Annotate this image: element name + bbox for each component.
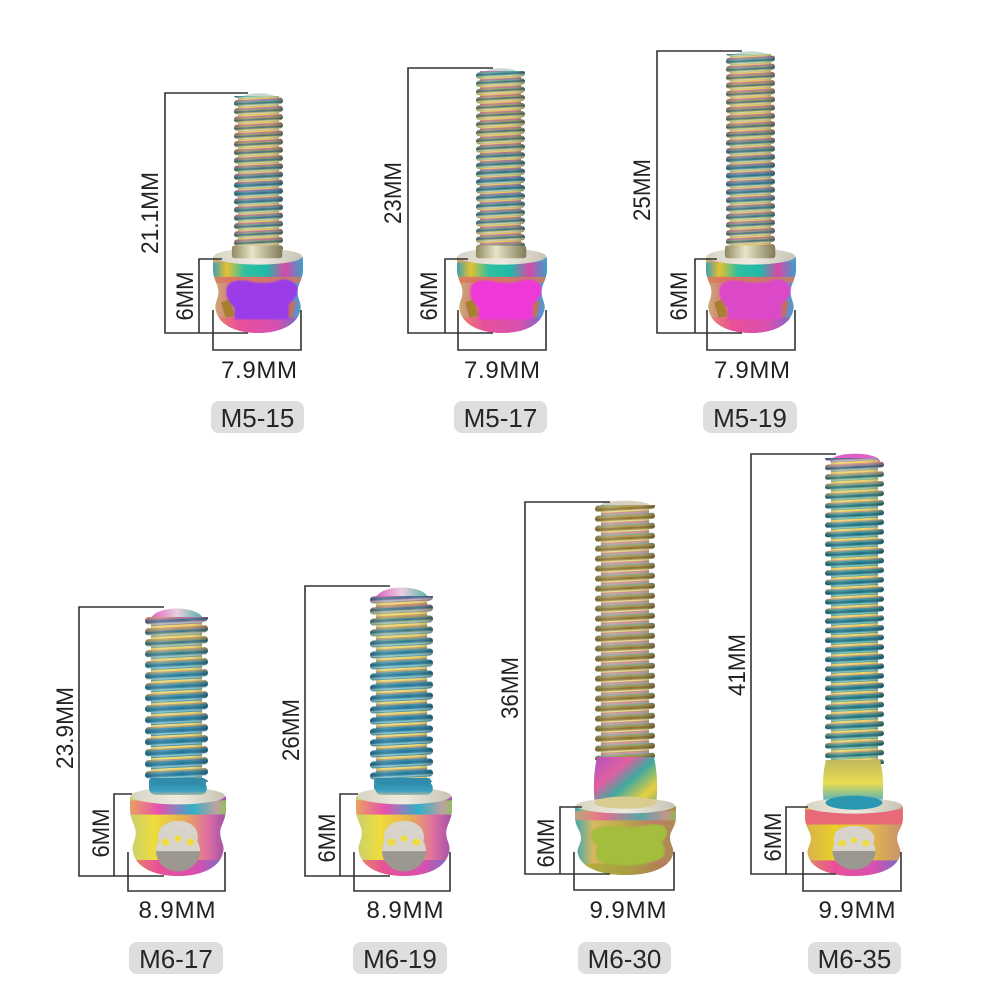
- dimension: 9.9MM: 9.9MM: [818, 897, 896, 924]
- bolt: M6-35: [805, 454, 903, 876]
- dimension lines: M6-19: [305, 586, 450, 891]
- threaded shaft: [145, 608, 208, 794]
- dimension: 36MM: 36MM: [497, 657, 524, 719]
- threaded shaft: [823, 454, 884, 812]
- bolt: M6-30: [575, 501, 676, 875]
- threaded shaft: [476, 68, 525, 254]
- dimension: 6MM: 6MM: [88, 808, 115, 858]
- dimension: 6MM: 6MM: [314, 814, 341, 862]
- socket head: [130, 782, 226, 876]
- dimension: 6MM: 6MM: [416, 272, 443, 320]
- dimension: 6MM: 6MM: [666, 272, 693, 320]
- label: M6-17: M6-17: [139, 944, 213, 974]
- label: M6-19: M6-19: [363, 944, 437, 974]
- dimension lines: M5-19: [657, 51, 795, 350]
- bolt: M5-17: [457, 68, 547, 333]
- bolt: M6-17: [130, 608, 226, 876]
- dimension: 6MM: 6MM: [172, 272, 199, 320]
- dimension lines: M5-15: [165, 93, 301, 350]
- dimension lines: M6-17: [79, 607, 225, 891]
- label: M5-19: M5-19: [713, 403, 787, 433]
- dimension: 23.9MM: 23.9MM: [52, 687, 79, 769]
- dimension: 25MM: 25MM: [629, 159, 656, 221]
- dimension: 7.9MM: 7.9MM: [714, 357, 790, 384]
- socket head: [356, 782, 452, 876]
- dimension: 41MM: 41MM: [724, 634, 751, 696]
- label: M6-30: M6-30: [588, 944, 661, 974]
- socket head: [575, 796, 676, 875]
- threaded shaft: [594, 501, 657, 812]
- socket head: [805, 796, 903, 876]
- socket head: [457, 245, 547, 333]
- socket head: [213, 245, 303, 333]
- bolt: M5-19: [706, 51, 796, 333]
- dimension: 6MM: 6MM: [760, 812, 787, 862]
- dimension: 21.1MM: 21.1MM: [137, 172, 164, 254]
- socket head: [706, 245, 796, 333]
- label: M6-35: M6-35: [818, 944, 891, 974]
- dimension: 23MM: 23MM: [380, 162, 407, 224]
- dimension: 6MM: 6MM: [533, 818, 560, 868]
- threaded shaft: [370, 588, 433, 794]
- icon: engraved logo: [156, 821, 200, 872]
- icon: engraved logo: [832, 826, 876, 870]
- threaded shaft: [234, 93, 283, 254]
- threaded shaft: [726, 51, 775, 254]
- dimension: 7.9MM: 7.9MM: [464, 357, 540, 384]
- dimension lines: M6-35: [751, 454, 901, 891]
- label: M5-15: M5-15: [221, 403, 294, 433]
- dimension: 8.9MM: 8.9MM: [366, 897, 444, 924]
- icon: engraved logo: [382, 821, 426, 872]
- dimension: 7.9MM: 7.9MM: [221, 357, 297, 384]
- dimension lines: M6-30: [525, 502, 674, 890]
- dimension lines: M5-17: [408, 68, 546, 350]
- dimension: 26MM: 26MM: [278, 699, 305, 761]
- bolt: M5-15: [213, 93, 303, 333]
- bolt: M6-19: [356, 588, 452, 876]
- dimension: 8.9MM: 8.9MM: [138, 897, 216, 924]
- dimension: 9.9MM: 9.9MM: [590, 897, 666, 924]
- label: M5-17: M5-17: [464, 403, 537, 433]
